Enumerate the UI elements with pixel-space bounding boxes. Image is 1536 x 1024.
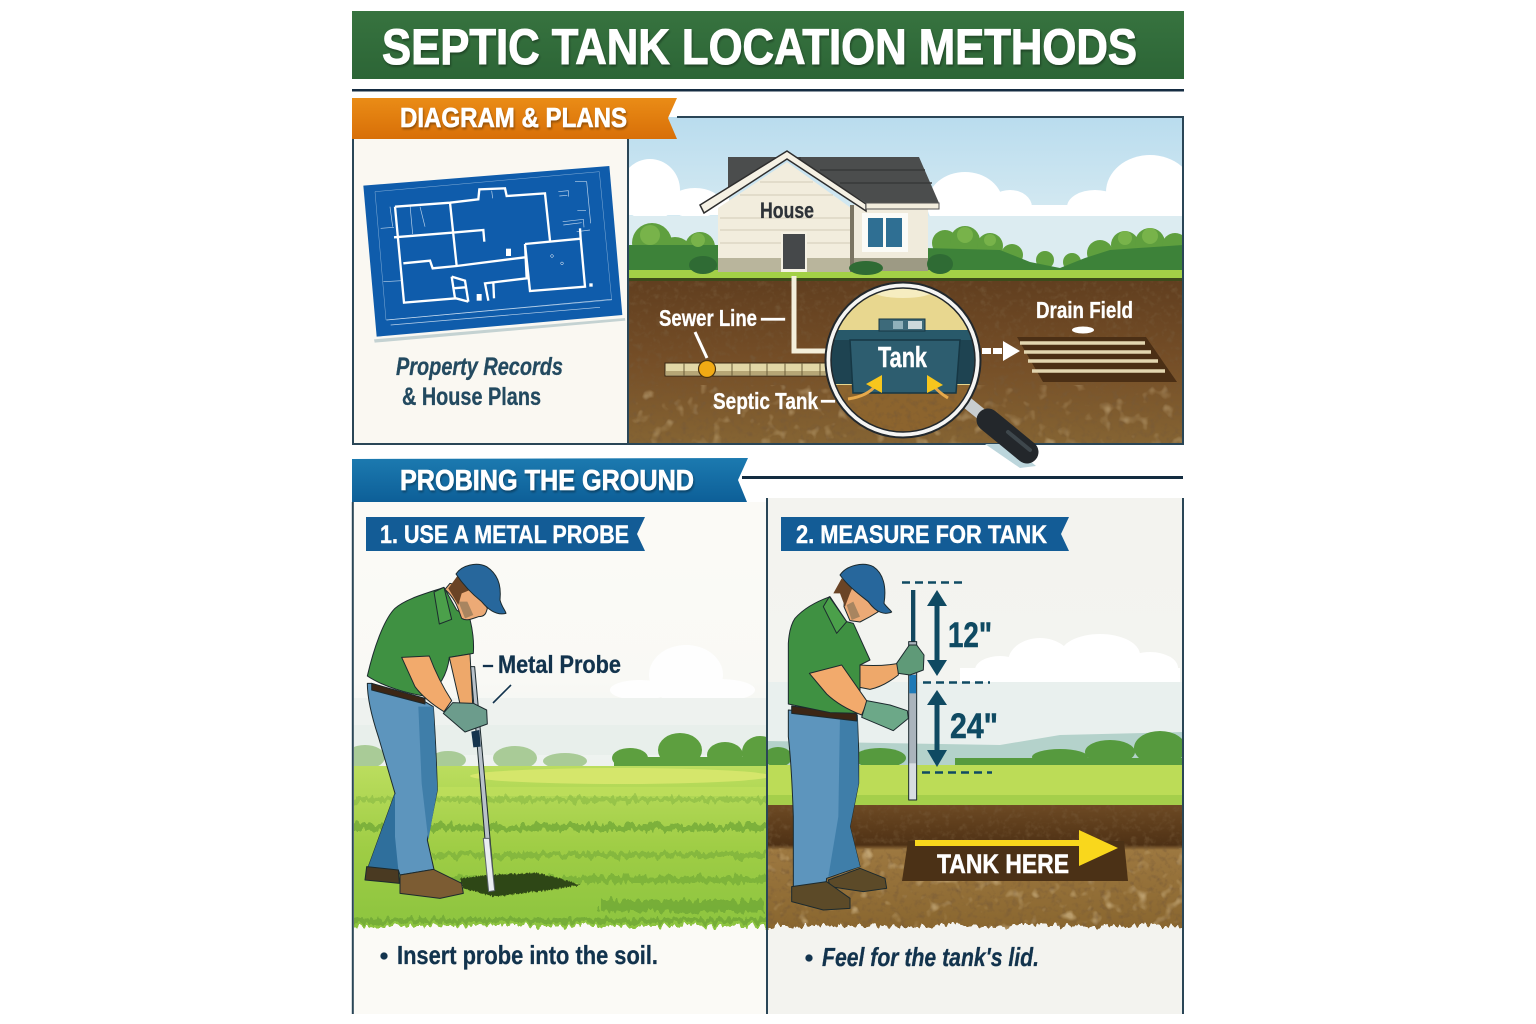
gloves xyxy=(897,645,924,675)
tree lines xyxy=(629,223,1188,273)
right step background xyxy=(767,498,1183,1014)
metal probe label xyxy=(483,651,621,703)
grass strip xyxy=(629,270,1182,278)
site cross-section scene xyxy=(620,117,1194,444)
ribbon: diagram and plans: DIAGRAM & PLANS xyxy=(400,102,627,133)
label: house: House xyxy=(760,198,814,223)
worker with probe xyxy=(365,564,580,898)
divider and side borders xyxy=(353,498,1183,1014)
field xyxy=(354,766,766,930)
ribbon: probing the ground xyxy=(352,458,748,502)
drain field xyxy=(1017,297,1177,382)
clouds xyxy=(960,634,1180,686)
ribbon: diagram and plans xyxy=(352,98,677,139)
cloud xyxy=(610,645,755,698)
lens view xyxy=(832,288,974,431)
trees xyxy=(764,731,1186,768)
label: drain field: Drain Field xyxy=(1036,297,1133,323)
cap xyxy=(840,564,892,613)
hills xyxy=(768,732,1183,768)
measurements xyxy=(902,582,998,772)
step 2 scene xyxy=(768,634,1182,930)
trees xyxy=(354,733,766,766)
jeans xyxy=(788,710,860,887)
label: 24 inches: 24" xyxy=(950,707,998,746)
ground xyxy=(629,278,1183,444)
boots xyxy=(828,868,887,892)
blueprint sheet xyxy=(363,166,625,343)
magnifier shadow xyxy=(985,444,1036,468)
sub-ribbon: step 1: 1. USE A METAL PROBE xyxy=(380,521,629,549)
magnifier xyxy=(825,282,1036,468)
boots xyxy=(365,867,399,883)
panel: probing the ground xyxy=(345,476,1186,1014)
left step background xyxy=(353,502,767,1014)
text: step 2 bullet: Feel for the tank's lid. xyxy=(822,942,1039,972)
sewer line pipes xyxy=(665,276,833,378)
far arm xyxy=(449,654,473,704)
heading: title: SEPTIC TANK LOCATION METHODS xyxy=(382,19,1137,75)
left sub-panel background xyxy=(353,139,628,444)
shrubs xyxy=(689,254,953,275)
probe xyxy=(911,590,915,643)
field xyxy=(768,765,1182,795)
soil xyxy=(768,805,1183,930)
panel: diagram and plans xyxy=(345,98,1194,1014)
near arm xyxy=(809,665,867,715)
worker measuring xyxy=(788,564,924,910)
near arm xyxy=(402,656,452,712)
text: property records xyxy=(396,353,563,411)
tank here marker: TANK HERE xyxy=(937,849,1069,879)
cap xyxy=(456,564,506,614)
shirt xyxy=(367,587,474,697)
title banner xyxy=(352,11,1184,79)
shirt xyxy=(788,597,870,713)
door xyxy=(781,242,807,272)
arrow to drain field xyxy=(982,341,1020,361)
label: 12 inches: 12" xyxy=(948,616,992,655)
house xyxy=(689,151,953,275)
neck and face xyxy=(445,583,487,620)
step 1 scene xyxy=(354,698,766,930)
sky xyxy=(629,117,1182,216)
jeans xyxy=(367,683,437,875)
ribbon: probing the ground: PROBING THE GROUND xyxy=(400,465,694,497)
sub-ribbon: step 2: 2. MEASURE FOR TANK xyxy=(796,521,1047,549)
label: sewer line xyxy=(659,305,785,358)
text: property records: & House Plans xyxy=(402,383,541,411)
shadow on ground xyxy=(460,873,580,897)
panel borders xyxy=(353,117,1183,444)
text: property records: Property Records xyxy=(396,353,563,381)
belt xyxy=(372,683,425,704)
window xyxy=(862,213,908,252)
belt xyxy=(792,706,857,721)
metal probe label: Metal Probe xyxy=(498,651,621,679)
handle xyxy=(965,401,1030,452)
label: septic tank: Septic Tank xyxy=(713,388,818,414)
glove xyxy=(443,703,487,732)
probe xyxy=(471,667,495,892)
text: step 1 bullet: Insert probe into the soil. xyxy=(397,940,658,970)
far arm xyxy=(860,663,898,689)
label: tank: Tank xyxy=(878,342,928,374)
label: sewer line: Sewer Line xyxy=(659,305,757,331)
face xyxy=(844,587,878,622)
clouds xyxy=(629,155,1182,216)
tank here marker xyxy=(902,830,1128,881)
